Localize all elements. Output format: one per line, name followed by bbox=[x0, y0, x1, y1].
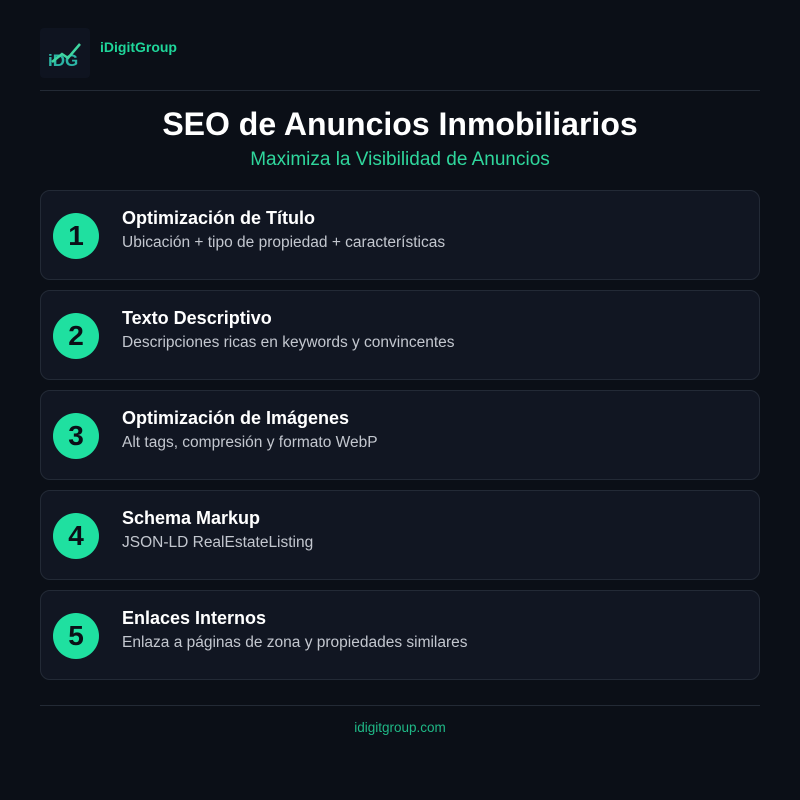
card 1 bbox=[40, 190, 760, 280]
card 5 bbox=[40, 590, 760, 680]
card 1: Optimización de Título bbox=[122, 208, 315, 228]
card 4: 4 bbox=[68, 520, 84, 551]
card 3: Alt tags, compresión y formato WebP bbox=[122, 434, 378, 451]
card 2: 2 bbox=[68, 320, 84, 351]
brand name: iDigitGroup bbox=[100, 39, 177, 55]
card 5: 5 bbox=[68, 620, 84, 651]
subtitle: Maximiza la Visibilidad de Anuncios bbox=[250, 149, 550, 170]
title: SEO de Anuncios Inmobiliarios bbox=[162, 106, 638, 142]
card 3: Optimización de Imágenes bbox=[122, 408, 349, 428]
card 4: Schema Markup bbox=[122, 508, 260, 528]
card 2 bbox=[40, 290, 760, 380]
logo bbox=[40, 28, 90, 78]
card 1: Ubicación + tipo de propiedad + características bbox=[122, 234, 445, 251]
card 4 bbox=[40, 490, 760, 580]
card 2: Texto Descriptivo bbox=[122, 308, 272, 328]
logo: iDG bbox=[48, 51, 78, 70]
card 2: Descripciones ricas en keywords y convincentes bbox=[122, 334, 455, 351]
footer: idigitgroup.com bbox=[354, 720, 446, 735]
card 4: JSON-LD RealEstateListing bbox=[122, 534, 313, 551]
card 1: 1 bbox=[68, 220, 84, 251]
card 5: Enlaza a páginas de zona y propiedades similares bbox=[122, 634, 468, 651]
card 3: 3 bbox=[68, 420, 84, 451]
card 3 bbox=[40, 390, 760, 480]
card 5: Enlaces Internos bbox=[122, 608, 266, 628]
